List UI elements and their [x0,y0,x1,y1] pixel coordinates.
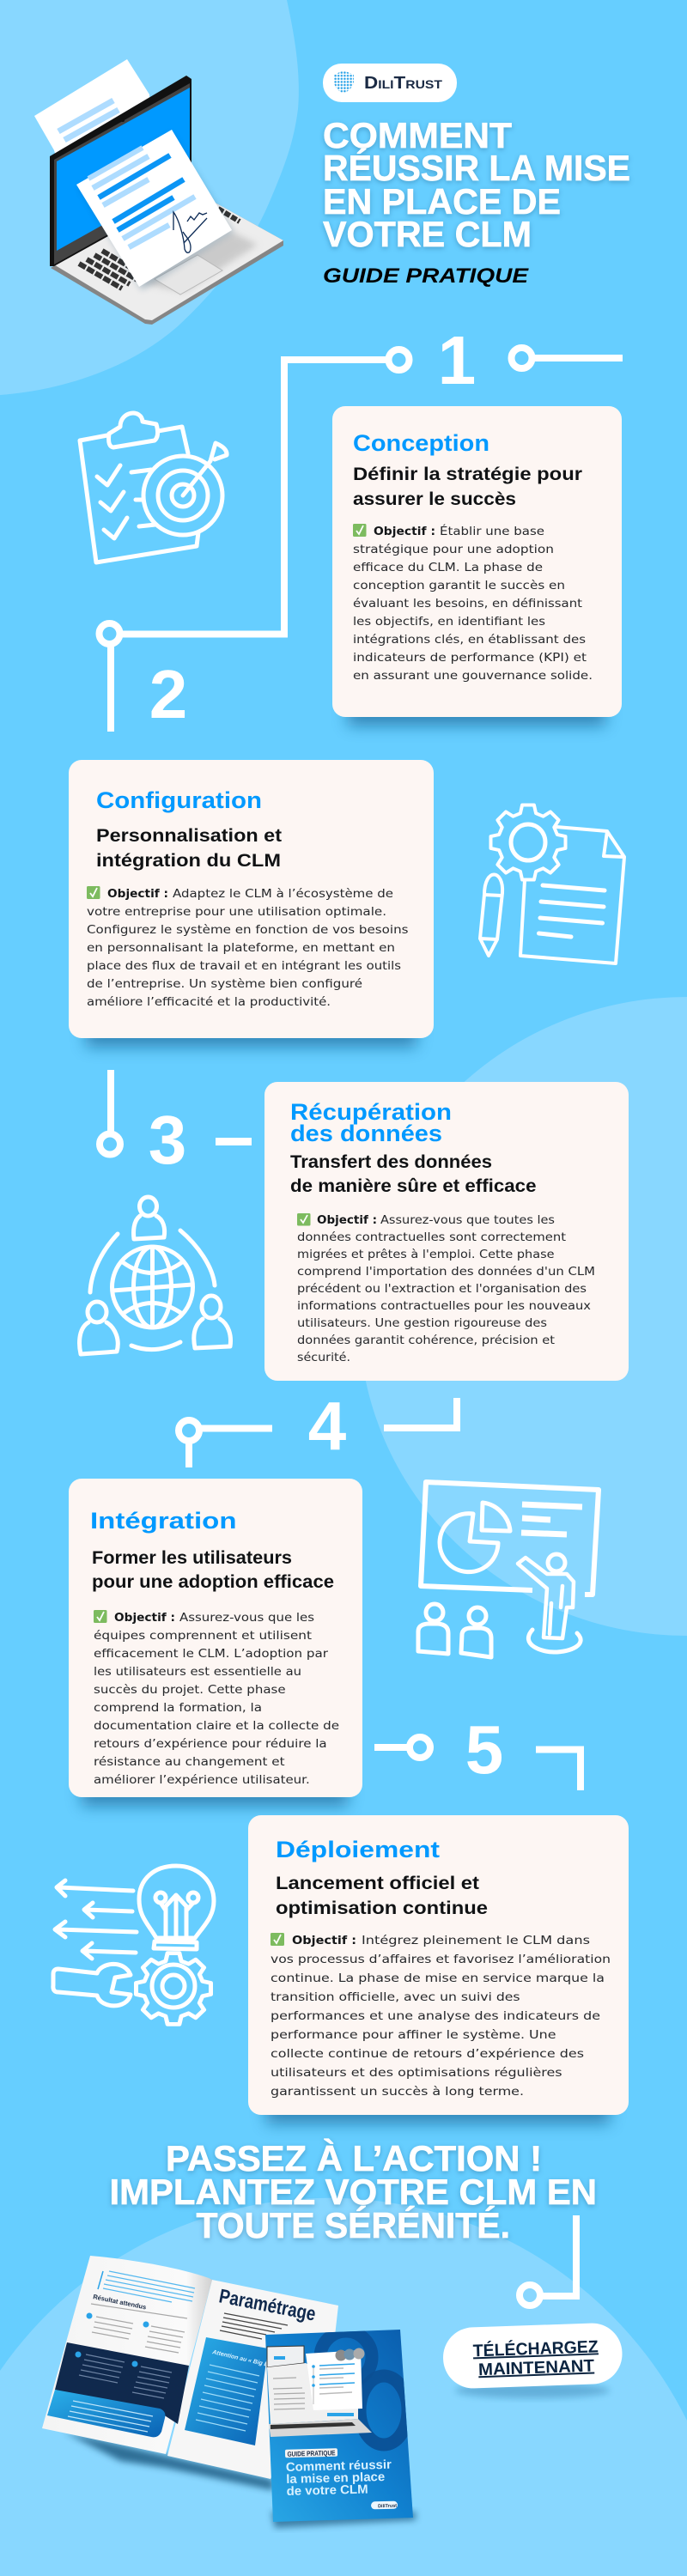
number 4: 4 [308,1388,347,1464]
objective text: les utilisateurs est essentielle au [94,1665,301,1679]
objective text: intégrations clés, en établissant des [353,633,586,647]
connector: right of 4 [384,1398,457,1428]
icon: globe and people [80,1197,231,1354]
objective text: équipes comprennent et utilisent [94,1629,312,1643]
light blob: right middle [359,997,687,1636]
number 5: 5 [465,1711,503,1788]
objective text: Objectif : [114,1611,175,1625]
download button: MAINTENANT [478,2357,594,2379]
objective text: améliore l’efficacité et la productivité. [87,995,331,1009]
cover logo [371,2501,398,2509]
light blob: bottom [0,2198,687,2576]
objective text: utilisateurs. Une gestion rigoureuse des [297,1316,547,1330]
keyboard [79,209,240,289]
left page dark panel [55,2342,189,2424]
panel: conception [332,406,622,726]
title: EN PLACE DE [323,181,561,222]
subheading: pour une adoption efficace [92,1572,334,1592]
connector: call to action [520,2215,576,2306]
right page [167,2280,338,2479]
cover logo: DiliTrust [378,2504,397,2509]
heading: des données [290,1121,442,1146]
cover title: Comment réussir [286,2458,392,2475]
download button [442,2322,623,2398]
cover title [286,2458,392,2499]
left page [42,2256,212,2454]
objective text: résistance au changement et [94,1755,285,1769]
objective text: comprend la formation, la [94,1701,262,1715]
subheading: de manière sûre et efficace [290,1176,536,1196]
objective text [87,887,409,1009]
objective text: votre entreprise pour une utilisation optimale. [87,905,386,919]
signature [173,212,207,252]
cover tag: GUIDE PRATIQUE [287,2449,336,2458]
trackpad [155,255,222,295]
icon: check [297,1213,311,1226]
heading: Configuration [96,787,262,813]
subheading: Définir la stratégie pour [353,465,582,484]
laptop base [51,187,283,325]
objective text [297,1213,595,1364]
objective text: efficacement le CLM. L’adoption par [94,1647,328,1661]
objective text: vos processus d’affaires et favorisez l’amélioration [271,1953,611,1966]
objective text: précédent ou l'extraction et l'organisation des [297,1282,587,1296]
right page blue panel [185,2337,268,2445]
subheading [276,1874,488,1918]
connector: 1 to 2 [100,349,409,732]
left page blue panel [47,2390,165,2437]
objective text: continue. La phase de mise en service marque la [271,1971,605,1985]
objective text [353,524,593,683]
icon: check [87,886,100,899]
title: RÉUSSIR LA MISE [323,148,630,188]
heading: Conception [353,430,489,456]
left page text: Résultat attendus [93,2293,147,2312]
number 2: 2 [149,656,187,732]
objective text: performance pour affiner le système. Une [271,2028,556,2042]
icon: checklist and target [80,413,227,562]
subheading: Personnalisation et [96,826,282,846]
icon: presentation board [418,1482,599,1657]
objective text: en assurant une gouvernance solide. [353,669,593,683]
objective text: de l’entreprise. Un système bien configuré [87,977,362,991]
subheading [290,1152,536,1196]
illustration: open brochure: Attention au « Big Bang » [211,2349,284,2372]
call to action heading: TOUTE SÉRÉNITÉ. [196,2205,510,2245]
cover mock-up screens [267,2346,372,2437]
objective text: Assurez-vous que les [179,1611,314,1625]
illustration: laptop with contract [34,59,283,325]
subheading: Lancement officiel et [276,1874,479,1893]
heading [290,1099,452,1146]
panel: deployment [248,1815,629,2123]
subheading: assurer le succès [353,489,516,509]
objective text: utilisateurs et des optimisations régulières [271,2066,562,2080]
subtitle: GUIDE PRATIQUE [323,264,529,288]
logo pill [323,64,457,102]
title: VOTRE CLM [323,214,532,254]
icon: bulb, gear, wrench and arrows [53,1866,214,2024]
title: COMMENT [323,115,512,155]
front document [79,133,234,290]
icon: gear, document and pencil [480,805,624,963]
objective text: collecte continue de retours d’expérience des [271,2047,584,2061]
back document [34,59,155,172]
subheading: Former les utilisateurs [92,1548,292,1568]
connector: right of 1 [512,348,623,368]
laptop lid [50,76,192,266]
call to action heading: PASSEZ À L’ACTION ! [166,2138,542,2178]
illustration: open brochure [42,2256,416,2528]
connector: right of 5 [536,1750,581,1790]
objective text: succès du projet. Cette phase [94,1683,286,1697]
light blob: top left [0,0,299,395]
heading: Intégration [90,1508,237,1534]
objective text: améliorer l’expérience utilisateur. [94,1773,310,1787]
objective text: retours d’expérience pour réduire la [94,1737,327,1751]
subheading: optimisation continue [276,1899,488,1918]
objective text: conception garantit le succès en [353,579,565,592]
objective text: documentation claire et la collecte de [94,1719,339,1733]
objective text: garantissent un succès à long terme. [271,2085,524,2099]
objective text: évaluant les besoins, en définissant [353,597,582,611]
logo shield [334,70,354,94]
right page title: Paramétrage [217,2284,318,2325]
objective text: Objectif : [374,525,435,538]
title [323,115,630,254]
subheading [96,826,282,871]
objective text: comprend l'importation des données d'un CLM [297,1265,595,1279]
objective text: informations contractuelles pour les nouveaux [297,1299,591,1313]
base shadow [142,232,258,292]
objective text: Établir une base [440,524,544,538]
objective text [271,1934,611,2099]
objective text: données contractuelles sont correctement [297,1230,566,1244]
number 1: 1 [438,322,476,398]
icon: check [271,1933,284,1946]
connector: left of 4 [179,1420,272,1467]
panel: configuration [69,760,434,1047]
left page text [86,2271,195,2353]
objective text: Objectif : [292,1934,356,1947]
subheading [353,465,582,509]
connector: 2 to 3 [100,1070,120,1154]
objective text: en personnalisant la plateforme, en mettant en [87,941,395,955]
cover title: de votre CLM [286,2483,368,2499]
objective text: Adaptez le CLM à l’écosystème de [173,887,393,901]
subheading [92,1548,334,1592]
subheading: intégration du CLM [96,851,281,871]
heading: Déploiement [276,1837,440,1862]
objective text: stratégique pour une adoption [353,543,554,556]
logo wordmark: DiliTrust [364,74,442,93]
objective text: migrées et prêtes à l'emploi. Cette phase [297,1248,555,1261]
objective text: les objectifs, en identifiant les [353,615,545,629]
objective text: transition officielle, avec un suivi des [271,1990,520,2004]
heading: Récupération [290,1099,452,1125]
dash right of 3 [216,1138,252,1145]
objective text: Assurez-vous que toutes les [380,1213,555,1227]
objective text: Objectif : [107,887,168,901]
brochure cover [265,2330,413,2522]
brochure shadow [64,2432,273,2490]
objective text: place des flux de travail et en intégrant les outils [87,959,401,973]
icon: check [94,1610,106,1623]
objective text: sécurité. [297,1351,350,1364]
objective text: données garantit cohérence, précision et [297,1334,555,1347]
call to action heading [110,2138,597,2245]
panel: data recovery [264,1082,629,1381]
objective text [94,1611,339,1787]
cover rings [320,2331,408,2445]
objective text: Intégrez pleinement le CLM dans [362,1934,590,1947]
objective text: Configurez le système en fonction de vos besoins [87,923,409,937]
cover shadow [271,2512,416,2528]
subheading: Transfert des données [290,1152,492,1172]
objective text: indicateurs de performance (KPI) et [353,651,587,665]
number 3: 3 [149,1102,186,1178]
panel: integration [69,1479,362,1806]
objective text: Objectif : [317,1213,377,1227]
call to action heading: IMPLANTEZ VOTRE CLM EN [110,2172,597,2212]
objective text: performances et une analyse des indicateurs de [271,2009,600,2023]
connector: left of 5 [374,1737,430,1758]
objective text: efficace du CLM. La phase de [353,561,543,574]
download button: TÉLÉCHARGEZ [472,2336,599,2360]
cover title: la mise en place [286,2470,385,2487]
icon: check [353,524,366,537]
